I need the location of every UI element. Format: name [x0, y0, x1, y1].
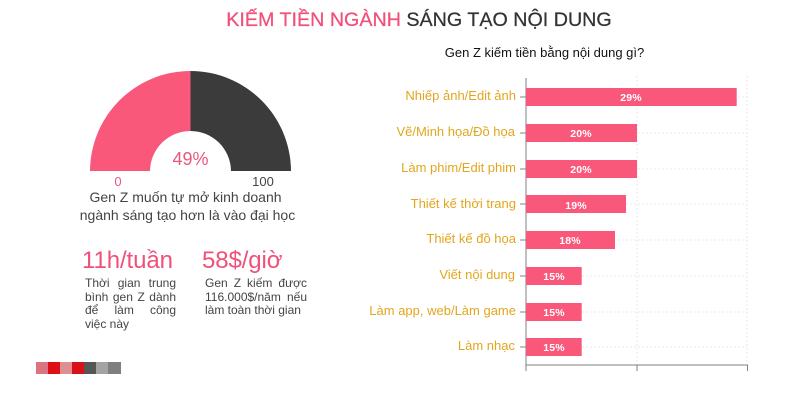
gauge caption: Gen Z muốn tự mở kinh doanh [89, 189, 282, 205]
gauge value: 49% [172, 149, 209, 169]
bar: Thiết kế thời trang [411, 195, 626, 213]
gauge min label: 0 [114, 174, 122, 189]
stat text: hours: bình gen Z dành [85, 290, 176, 304]
gauge chart [90, 71, 291, 189]
bar: Nhiếp ảnh/Edit ảnh: 29% [620, 92, 642, 104]
color swatches [36, 362, 121, 374]
stat heading: hours: 11h/tuần [82, 247, 173, 274]
bar: Làm nhạc [458, 338, 582, 356]
bar: Thiết kế thời trang: Thiết kế thời trang [411, 196, 516, 211]
bar: Thiết kế đồ họa [426, 231, 615, 249]
gauge caption: ngành sáng tạo hơn là vào đại học [80, 207, 295, 223]
bar: Làm nhạc: Làm nhạc [458, 338, 515, 353]
bar: Viết nội dung: 15% [543, 271, 565, 283]
stat text: pay: làm toàn thời gian [205, 303, 301, 317]
chart title: Gen Z kiếm tiền bằng nội dung gì? [445, 45, 644, 60]
gauge max label: 100 [252, 174, 274, 189]
bar: Làm phim/Edit phim: 20% [570, 164, 592, 176]
bar: Làm phim/Edit phim: Làm phim/Edit phim [401, 160, 516, 175]
bar: Vẽ/Minh họa/Đồ họa: Vẽ/Minh họa/Đồ họa [396, 124, 516, 139]
stat text: pay [205, 276, 307, 317]
title: KIẾM TIỀN NGÀNH SÁNG TẠO NỘI DUNG [226, 8, 612, 31]
stat text: pay: Gen Z kiếm được [205, 276, 307, 290]
stat heading: pay: 58$/giờ [202, 247, 283, 274]
stat text: hours [85, 276, 176, 331]
stat text: hours: Thời gian trung [85, 276, 176, 290]
bar: Nhiếp ảnh/Edit ảnh [405, 88, 737, 106]
gauge pink segment [90, 71, 190, 171]
bar: Nhiếp ảnh/Edit ảnh: Nhiếp ảnh/Edit ảnh [405, 88, 516, 103]
bar: Vẽ/Minh họa/Đồ họa: 20% [570, 128, 592, 140]
bar: Làm phim/Edit phim [401, 160, 637, 178]
bar chart [369, 76, 748, 371]
stat text: hours: việc này [85, 317, 129, 331]
bar: Thiết kế thời trang: 19% [565, 200, 587, 212]
gauge caption [80, 189, 295, 223]
gauge dark segment [190, 71, 291, 171]
bar: Thiết kế đồ họa: 18% [559, 235, 581, 247]
stat text: hours: để làm công [85, 303, 176, 317]
axes [520, 78, 748, 371]
grid lines [526, 76, 747, 365]
bar: Làm nhạc: 15% [543, 342, 565, 354]
bar: Thiết kế đồ họa: Thiết kế đồ họa [426, 231, 517, 246]
bar: Làm app, web/Làm game [369, 303, 582, 321]
bar: Làm app, web/Làm game: Làm app, web/Làm game [369, 303, 516, 318]
bar: Vẽ/Minh họa/Đồ họa [396, 124, 637, 142]
bar: Viết nội dung [439, 267, 582, 285]
bar: Viết nội dung: Viết nội dung [439, 267, 515, 282]
stat text: pay: 116.000$/năm nếu [205, 290, 307, 304]
bar: Làm app, web/Làm game: 15% [543, 307, 565, 319]
